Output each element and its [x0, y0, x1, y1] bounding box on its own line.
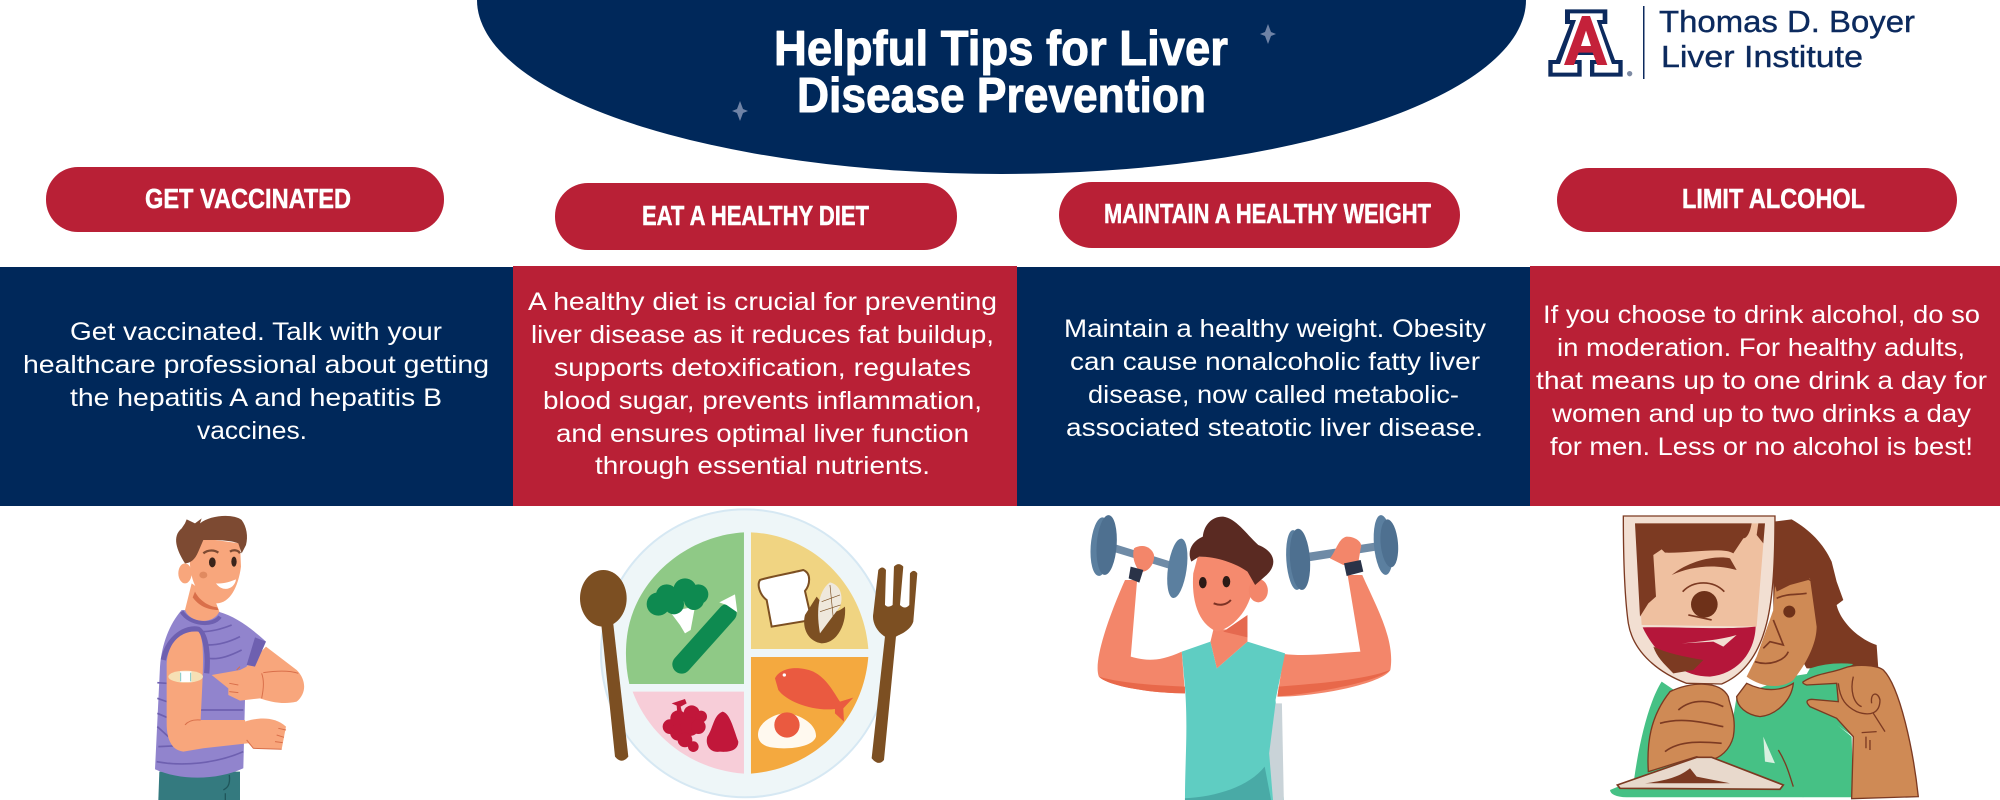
panel: healthy weight text: associated steatotic liver disease.	[1066, 414, 1483, 442]
panel: get vaccinated text	[0, 267, 513, 506]
title: Disease Prevention	[797, 69, 1206, 123]
panel: limit alcohol text: women and up to two drinks a day	[1551, 400, 1972, 428]
broccoli and cucumber	[647, 578, 737, 664]
glass base	[1617, 757, 1783, 789]
icon: woman with wine glass	[1610, 516, 1918, 799]
panel: healthy weight text	[1017, 267, 1530, 506]
panel: limit alcohol text	[1530, 266, 2000, 506]
panel: limit alcohol text: that means up to one drink a day for	[1536, 367, 1987, 395]
icon: vaccinated man	[155, 516, 304, 800]
icon: man lifting dumbbells	[1089, 514, 1400, 800]
bandage	[168, 671, 203, 683]
right dumbbell	[1284, 514, 1400, 591]
panel: healthy diet text: and ensures optimal liver function	[556, 420, 969, 448]
pill heading: maintain a healthy weight: MAINTAIN A HEALTHY WEIGHT	[1104, 198, 1431, 229]
panel: limit alcohol text: If you choose to drink alcohol, do so	[1543, 301, 1980, 329]
pill heading: get vaccinated	[46, 167, 444, 232]
bread and corn	[759, 570, 845, 643]
panel: limit alcohol text: in moderation. For healthy adults,	[1557, 334, 1965, 362]
panel: healthy weight text: can cause nonalcoholic fatty liver	[1070, 348, 1480, 376]
left dumbbell	[1089, 514, 1191, 599]
pill heading: limit alcohol	[1557, 168, 1957, 232]
hand holding stem	[1648, 684, 1734, 772]
panel: healthy diet text: through essential nutrients.	[595, 452, 930, 480]
logo: Thomas D. Boyer Liver Institute: Liver Institute	[1661, 39, 1863, 74]
title: Helpful Tips for Liver	[774, 22, 1228, 76]
title banner	[477, 0, 1526, 174]
title	[774, 22, 1228, 123]
wine glass	[1623, 516, 1775, 684]
panel: healthy weight text: disease, now called metabolic-	[1088, 381, 1459, 409]
logo: Thomas D. Boyer Liver Institute: Thomas D. Boyer	[1659, 4, 1915, 39]
panel: limit alcohol text: for men. Less or no alcohol is best!	[1550, 433, 1973, 461]
panel: healthy diet text: supports detoxification, regulates	[554, 354, 971, 382]
pill heading: limit alcohol: LIMIT ALCOHOL	[1682, 183, 1865, 214]
panel: healthy diet text: blood sugar, prevents inflammation,	[543, 387, 982, 415]
panel: get vaccinated text: healthcare professional about getting	[23, 351, 489, 379]
panel: healthy diet text: A healthy diet is crucial for preventing	[528, 288, 997, 316]
panel: healthy diet text	[513, 266, 1017, 506]
panel: healthy diet text: liver disease as it reduces fat buildup,	[531, 321, 994, 349]
fork	[872, 564, 917, 763]
pill heading: maintain a healthy weight	[1059, 182, 1460, 248]
raised hand and arm	[1803, 665, 1918, 799]
panel: get vaccinated text: the hepatitis A and hepatitis B	[70, 384, 442, 412]
panel: get vaccinated text: vaccines.	[197, 417, 307, 445]
logo: Thomas D. Boyer Liver Institute	[1548, 4, 1915, 79]
grapes and plum	[663, 699, 738, 752]
pill heading: eat a healthy diet: EAT A HEALTHY DIET	[642, 200, 869, 231]
pill heading: get vaccinated: GET VACCINATED	[145, 183, 351, 214]
fish and egg	[758, 668, 853, 748]
panel: healthy weight text: Maintain a healthy weight. Obesity	[1064, 315, 1487, 343]
icon: food plate with spoon and fork	[580, 509, 917, 797]
panel: get vaccinated text: Get vaccinated. Talk with your	[70, 318, 442, 346]
spoon	[580, 570, 628, 761]
pill heading: eat a healthy diet	[555, 183, 957, 250]
